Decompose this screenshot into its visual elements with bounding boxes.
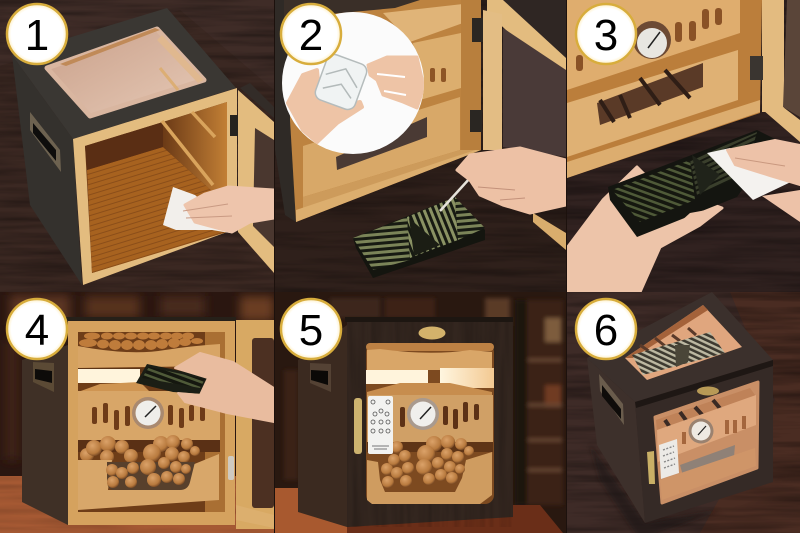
step number 1	[7, 4, 67, 64]
icon: remote control	[659, 439, 679, 479]
step number 2	[281, 4, 341, 64]
icon: hand with white cloth	[707, 140, 800, 222]
step number 6: 6	[594, 306, 618, 355]
step number 5: 5	[299, 306, 323, 355]
panel: step 6 finished humidor with humidifier on top	[567, 292, 800, 533]
gold door handle	[354, 398, 362, 454]
cabinet	[12, 8, 240, 285]
cabinet body	[587, 292, 773, 533]
icon: remote control	[368, 396, 393, 454]
top shelf cigars	[79, 332, 203, 350]
panel: step 4 place the humidifier on the shelf	[0, 292, 274, 533]
shelf light	[78, 369, 140, 383]
icon: hand with pipette	[440, 148, 566, 213]
lower tray cigars	[80, 435, 200, 464]
step number 5	[281, 299, 341, 359]
panel: step 5 close the door	[275, 292, 566, 533]
humidifier tray	[353, 197, 485, 278]
gold door handle	[647, 451, 655, 484]
brand plate	[697, 386, 719, 396]
brand plate	[418, 326, 446, 340]
door	[750, 0, 800, 142]
step number 4: 4	[25, 306, 49, 355]
humidifier tray in hand	[136, 353, 274, 422]
panel: step 3 wipe the humidifier dry	[567, 0, 800, 292]
front window with shelves	[655, 382, 758, 503]
step number 6	[576, 299, 636, 359]
cabinet front	[275, 0, 485, 222]
icon: hygrometer gauge	[633, 21, 671, 59]
step number 3	[576, 4, 636, 64]
lower tray cigars	[391, 435, 474, 463]
humidifier tray held in hand	[567, 130, 777, 292]
step number 1: 1	[25, 11, 49, 60]
cabinet front with shelves	[66, 317, 236, 525]
cabinet front with drawers	[567, 0, 762, 178]
step number 4	[7, 299, 67, 359]
icon: hygrometer gauge	[407, 398, 439, 430]
panel: step 2 add water to the humidifier	[275, 0, 566, 292]
cabinet side	[22, 345, 68, 525]
icon: wiping hand with cloth	[163, 187, 274, 233]
icon: hygrometer gauge	[132, 397, 164, 429]
inset: pouring water into a glass	[282, 12, 424, 154]
cabinet window with shelves	[366, 343, 494, 504]
step number 2: 2	[299, 11, 323, 60]
cabinet body	[298, 317, 513, 527]
door	[238, 83, 274, 273]
top window with humidifier	[625, 305, 742, 380]
icon: hygrometer gauge	[688, 418, 714, 444]
panel: step 1 wipe the cabinet interior	[0, 0, 274, 292]
step number 3: 3	[594, 11, 618, 60]
door	[236, 320, 274, 529]
door	[483, 0, 566, 250]
